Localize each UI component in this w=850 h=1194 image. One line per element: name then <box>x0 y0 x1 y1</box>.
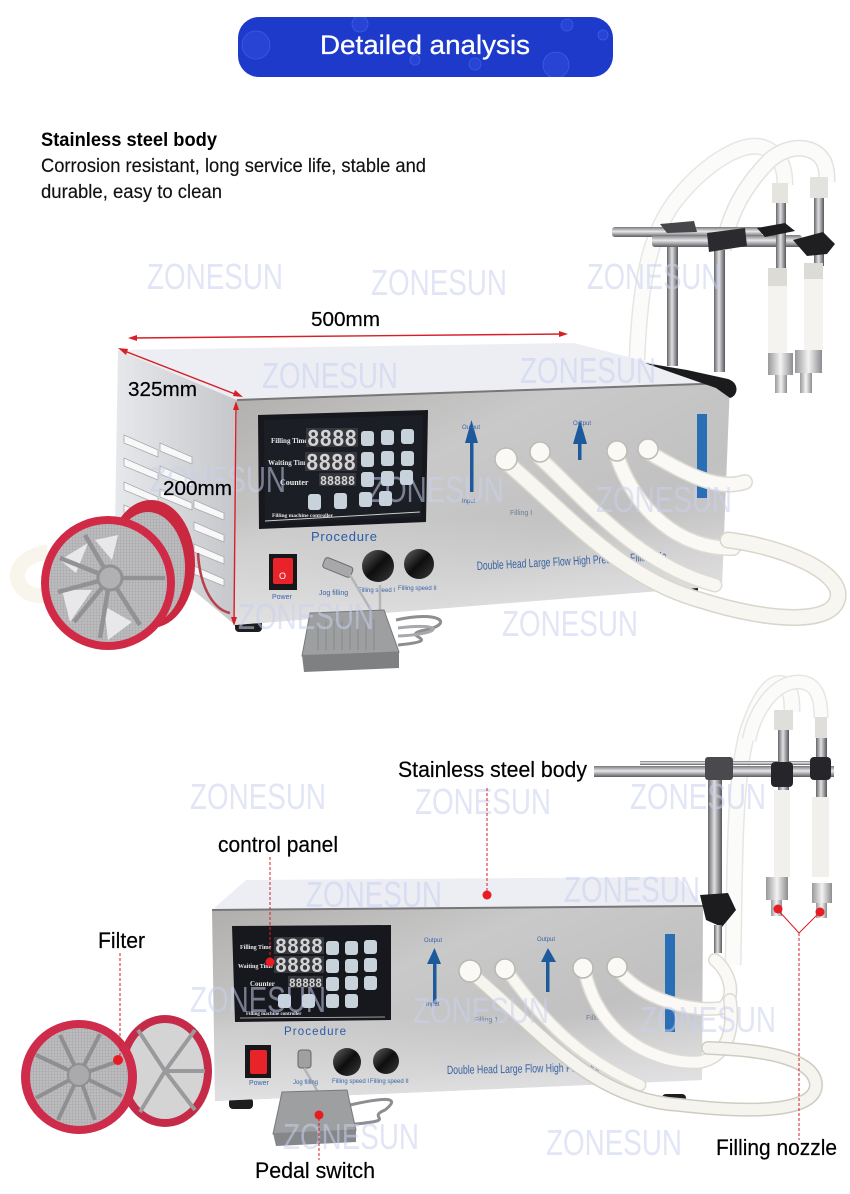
callout: control panel <box>218 832 338 966</box>
machine 1 lower hoses <box>506 452 838 617</box>
callout: stainless steel body: Stainless steel body <box>398 757 588 782</box>
machine 1 blue arrows and legends: Output <box>573 421 591 427</box>
machine 2 control panel: Waiting Time <box>238 964 273 970</box>
machine 1 upper hoses <box>637 146 827 360</box>
watermarks: ZONESUN <box>190 776 326 817</box>
machine 2 control panel: Filling machine controller <box>246 1012 302 1017</box>
watermarks: ZONESUN <box>238 596 374 637</box>
machine 1 hose connectors <box>495 439 658 470</box>
machine 1 power switch <box>269 554 297 601</box>
machine 1 blue arrows and legends <box>462 414 707 573</box>
callout: pedal switch <box>255 1110 375 1183</box>
machine 1 control panel: Counter <box>280 478 309 487</box>
machine 2 control panel: Counter <box>250 980 275 988</box>
machine 1 knobs <box>319 549 437 612</box>
machine 2 feet <box>229 1094 686 1109</box>
watermarks: ZONESUN <box>413 990 549 1031</box>
machine 2: labelled parts view <box>21 682 834 1146</box>
watermarks: ZONESUN <box>283 1116 419 1157</box>
machine 1 control panel: 88888 <box>320 474 355 490</box>
intro text block <box>41 130 426 203</box>
watermarks: ZONESUN <box>150 459 286 500</box>
intro text block: durable, easy to clean <box>41 182 222 203</box>
machine 2 upper hoses <box>733 682 821 965</box>
machine 2 control panel <box>232 925 391 1022</box>
watermarks <box>147 256 776 1163</box>
title banner <box>238 16 613 78</box>
machine 1 blue arrows and legends: Double Head Large Flow High Precision Filling Ma <box>476 549 667 573</box>
machine 2 front filter <box>21 1020 137 1134</box>
dimension label: 325mm: 325mm <box>128 379 197 401</box>
machine 1 front filter <box>41 516 175 650</box>
machine 1 control panel: Waiting Time <box>268 459 309 467</box>
watermarks: ZONESUN <box>587 256 721 297</box>
dimension arrows <box>118 331 568 626</box>
callout: stainless steel body <box>398 757 588 900</box>
machine 2 procedure label: Procedure <box>284 1026 346 1038</box>
machine 1 blue arrows and legends: Input <box>462 499 476 505</box>
machine 1 left hose <box>17 552 52 596</box>
machine 1 front panel <box>235 383 730 625</box>
machine 1 control panel: 8888 <box>306 451 356 478</box>
machine 1 blue arrows and legends: Output <box>462 425 480 431</box>
watermarks: ZONESUN <box>520 350 656 391</box>
machine 1 top face <box>118 343 730 400</box>
intro text block: Stainless steel body <box>41 130 217 151</box>
machine 2 blue arrows and legends: Input <box>426 1002 440 1008</box>
machine 1 control panel: 8888 <box>307 427 357 454</box>
machine 1 control panel: Filling machine controller <box>272 513 334 519</box>
machine 1 knobs: Jog filling <box>319 590 348 597</box>
machine 2 blue arrows and legends: Output <box>424 938 442 944</box>
dimension label: 500mm: 500mm <box>311 309 380 331</box>
machine 2 front panel <box>212 906 703 1101</box>
machine 2 hose connectors <box>459 957 627 982</box>
machine 1 procedure label: Procedure <box>311 529 377 544</box>
machine 2 blue arrows and legends: Double Head Large Flow High Precision <box>447 1060 602 1077</box>
machine 1 side face <box>115 350 237 625</box>
watermarks: ZONESUN <box>306 874 442 915</box>
callout: filling nozzle: Filling nozzle <box>716 1135 837 1160</box>
machine 1 side louvres <box>124 435 224 586</box>
machine 2 top face <box>212 877 703 910</box>
machine 2 control panel: 8888 <box>275 935 323 960</box>
watermarks: ZONESUN <box>630 776 766 817</box>
machine 2 knobs: Filling speed I <box>332 1079 369 1085</box>
machine 1 control panel <box>258 410 428 529</box>
watermarks: ZONESUN <box>368 469 504 510</box>
watermarks: ZONESUN <box>147 256 283 297</box>
watermarks: ZONESUN <box>415 781 551 822</box>
title banner: Detailed analysis <box>320 30 530 60</box>
machine 2 blue arrows and legends: Output <box>537 937 555 943</box>
machine 2 knobs: Filling speed II <box>370 1079 409 1085</box>
machine 2 blue arrows and legends: Filling 2 <box>586 1015 610 1022</box>
machine 2 power switch <box>245 1045 271 1087</box>
machine 2 blue arrows and legends: Filling 1 <box>474 1017 498 1024</box>
watermarks: ZONESUN <box>546 1122 682 1163</box>
machine 2 rear filter <box>118 1015 212 1127</box>
machine 1 rear clamp <box>645 363 736 398</box>
watermarks: ZONESUN <box>502 603 638 644</box>
machine 1 knobs: Filling speed I <box>358 588 395 594</box>
machine 1 feet <box>235 585 698 632</box>
machine 2 lower hoses <box>470 960 816 1110</box>
machine 1 rear filter <box>107 500 230 628</box>
machine 2 power switch: Power <box>249 1080 270 1087</box>
intro text block: Corrosion resistant, long service life, stable and <box>41 156 426 177</box>
machine 2 control panel: 8888 <box>275 954 323 979</box>
callout: pedal switch: Pedal switch <box>255 1158 375 1183</box>
machine 2 control panel: Filling Time <box>240 945 272 951</box>
machine 1: dimension view <box>17 146 838 672</box>
callout: control panel: control panel <box>218 832 338 857</box>
dimension label: 200mm: 200mm <box>163 478 232 500</box>
machine 2 nozzle stand <box>594 710 834 953</box>
callout: filling nozzle <box>716 904 837 1160</box>
machine 1 knobs: Filling speed II <box>398 586 437 592</box>
machine 2 knobs <box>293 1048 409 1092</box>
watermarks: ZONESUN <box>371 262 507 303</box>
callout: filter <box>98 928 145 1065</box>
machine 1 power switch: O <box>279 571 286 581</box>
machine 1 blue arrows and legends: Filling I <box>510 510 532 517</box>
machine 1 pedal switch <box>302 610 441 672</box>
watermarks: ZONESUN <box>640 999 776 1040</box>
watermarks: ZONESUN <box>262 355 398 396</box>
machine 1 power switch: Power <box>272 594 293 601</box>
machine 1 nozzle stand <box>612 177 835 393</box>
watermarks: ZONESUN <box>564 869 700 910</box>
machine 2 blue arrows and legends <box>424 934 675 1077</box>
machine 2 control panel: 88888 <box>289 976 322 991</box>
machine 2 pedal switch <box>273 1090 392 1146</box>
watermarks: ZONESUN <box>596 479 732 520</box>
machine 2 knobs: Jog filling <box>293 1080 318 1086</box>
machine 1 control panel: Filling Time <box>271 437 308 445</box>
watermarks: ZONESUN <box>190 979 326 1020</box>
callout: filter: Filter <box>98 928 145 953</box>
